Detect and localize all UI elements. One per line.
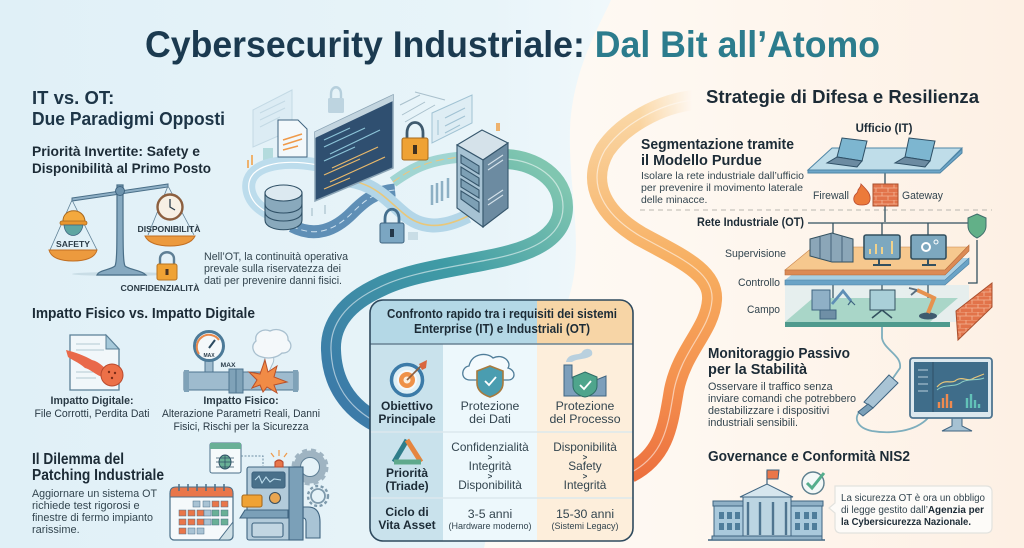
icon: industrial machine	[240, 450, 320, 540]
cell: IT priority: Disponibilità	[458, 478, 522, 492]
diagram: Purdue model	[640, 123, 992, 432]
cell: OT priority: >	[583, 453, 588, 462]
table: IT vs OT comparison	[370, 300, 633, 541]
icon: factory shield	[564, 349, 606, 397]
cell: IT priority: Integrità	[469, 459, 512, 473]
circuit lines	[400, 92, 445, 122]
text: continuity note: dati per prevenire danni fisici.	[204, 275, 342, 287]
label: confidenzialità: CONFIDENZIALITÀ	[120, 282, 200, 293]
ribbon: teal to blue flow	[331, 159, 563, 422]
icon: bug window	[210, 443, 263, 473]
table header: Confronto rapido tra i requisiti dei sistemi	[387, 306, 617, 321]
label: disponibilità: DISPONIBILITÀ	[138, 223, 200, 234]
text: patching description: Aggiornare un sistema OT	[32, 488, 157, 500]
text: monitoraggio description: Osservare il traffico senza	[708, 381, 833, 393]
callout: ANC obligation: di legge gestito dall’Agenzia per	[841, 505, 985, 516]
icon: government building	[708, 470, 825, 540]
icon: laptop right	[895, 138, 935, 167]
heading: monitoraggio: per la Stabilità	[708, 362, 808, 378]
row label: ciclo di vita: Vita Asset	[378, 518, 436, 532]
icon: document	[278, 120, 307, 157]
icon: shield	[968, 214, 986, 238]
icon: gears	[293, 450, 328, 506]
heading: patching: Il Dilemma del	[32, 451, 124, 468]
illustration: data flow from database to server	[248, 87, 508, 243]
icon: brick firewall	[873, 184, 898, 206]
label: impatto fisico: Alterazione Parametri Reali, Danni	[162, 408, 320, 420]
platform: controllo	[785, 258, 969, 285]
icon: monitor gears	[911, 235, 946, 265]
heading: priorità invertite: Disponibilità al Primo Posto	[32, 161, 211, 176]
heading: strategie: Strategie di Difesa e Resilienza	[706, 86, 980, 107]
label: controllo: Controllo	[738, 277, 780, 289]
table header: Enterprise (IT) e Industriali (OT)	[414, 321, 590, 336]
panel: IT vs OT	[32, 87, 349, 293]
cell: protezione processo: Protezione	[556, 399, 615, 413]
links between levels	[833, 275, 928, 298]
label: impatto fisico: Impatto Fisico:	[203, 395, 279, 407]
text: segmentazione description: delle minacce.	[641, 195, 707, 206]
icon: gauge and burst pipe	[184, 330, 298, 393]
pale swirl ribbon	[249, 162, 318, 220]
icon: robot cell	[812, 290, 855, 319]
row label: obiettivo: Obiettivo	[381, 399, 433, 413]
row label: priorità: Priorità	[386, 466, 428, 480]
icon: blue padlock	[380, 209, 404, 243]
label: max: MAX	[220, 362, 236, 369]
icon: padlock	[157, 252, 177, 280]
icon: gauge and burst pipe: MAX	[203, 353, 215, 359]
label: impatto fisico: Fisici, Rischi per la Sicurezza	[174, 421, 309, 433]
cell: OT priority: Safety	[568, 459, 602, 473]
icon: brick wall	[956, 283, 992, 340]
icon: database	[265, 185, 302, 230]
heading: IT vs OT: Due Paradigmi Opposti	[32, 108, 225, 129]
row label: ciclo di vita: Ciclo di	[385, 505, 429, 519]
field zone	[785, 285, 969, 322]
cell: OT lifecycle: 15-30 anni	[556, 507, 614, 521]
cell: OT priority: >	[583, 472, 588, 481]
label: gateway: Gateway	[902, 190, 944, 202]
label: safety: SAFETY	[56, 239, 90, 249]
icon: PLC cabinet	[810, 233, 853, 262]
label: ufficio: Ufficio (IT)	[856, 123, 913, 135]
row label: obiettivo: Principale	[378, 412, 436, 426]
callout: ANC obligation	[829, 486, 992, 533]
text: monitoraggio description: inviare comandi che potrebbero	[708, 393, 856, 405]
platform: supervisione	[785, 245, 969, 275]
heading: impatto: Impatto Fisico vs. Impatto Digitale	[32, 306, 255, 322]
callout: ANC obligation: la Cybersicurezza Nazionale.	[841, 517, 971, 528]
ribbon teal from window	[393, 157, 462, 182]
text: segmentazione description: Isolare la rete industriale dall’ufficio	[641, 171, 804, 182]
text: patching description: finestre di fermo impianto	[32, 512, 153, 524]
label: campo: Campo	[747, 304, 780, 316]
cell: IT lifecycle: 3-5 anni	[468, 507, 512, 521]
callout: ANC obligation: La sicurezza OT è ora un obbligo	[841, 493, 985, 504]
title: Cybersecurity Industriale: Dal Bit all’Atomo	[145, 24, 880, 65]
cell: IT priority: Confidenzialità	[451, 440, 529, 454]
icon: compliance check	[802, 472, 824, 494]
cell: OT priority: Disponibilità	[553, 440, 617, 454]
icon: monitoring display	[910, 358, 992, 431]
panel: monitoraggio passivo	[708, 346, 856, 429]
cell: OT priority: Integrità	[564, 478, 607, 492]
text: patching description: richiede test rigorosi e	[32, 500, 140, 512]
cell: OT lifecycle: (Sistemi Legacy)	[551, 521, 619, 531]
platform: office	[808, 148, 962, 173]
panel: governance	[708, 449, 992, 540]
heading: segmentazione: il Modello Purdue	[641, 153, 762, 169]
icon: corrupted file	[66, 335, 123, 390]
text: patching description: rarissime.	[32, 524, 80, 536]
label: impatto digitale: File Corrotti, Perdita Dati	[34, 408, 150, 420]
panel: patching dilemma	[32, 443, 328, 540]
label: supervisione: Supervisione	[725, 248, 786, 260]
row label: priorità: (Triade)	[385, 479, 429, 493]
pale background window left	[253, 90, 292, 147]
icon: calendar	[170, 484, 233, 540]
icon: orange padlock	[402, 122, 428, 160]
pale padlock	[328, 87, 344, 113]
label: firewall: Firewall	[813, 190, 849, 202]
icon: code window	[315, 95, 393, 201]
icon: laptop left	[827, 138, 867, 167]
platform: campo	[785, 298, 958, 327]
heading: governance: Governance e Conformità NIS2	[708, 449, 910, 465]
icon: server rack	[457, 130, 508, 227]
cell: protezione dati: Protezione	[461, 399, 520, 413]
text: monitoraggio description: destabilizzare i dispositivi	[708, 405, 829, 417]
heading: patching: Patching Industriale	[32, 467, 164, 484]
text: segmentazione description: per prevenire il movimento laterale	[641, 183, 803, 194]
label: impatto digitale: Impatto Digitale:	[50, 395, 134, 407]
icon: orange robot arm	[909, 288, 937, 320]
text: monitoraggio description: industriali sensibili.	[708, 417, 798, 429]
icon: flame	[854, 184, 870, 205]
ribbon: orange flow	[597, 100, 712, 473]
ribbon pale to server	[335, 180, 468, 225]
icon: target	[392, 360, 427, 396]
icon: scale with safety and availability	[49, 184, 200, 293]
heading: monitoraggio: Monitoraggio Passivo	[708, 346, 850, 362]
cell: IT lifecycle: (Hardware moderno)	[448, 521, 532, 531]
ribbon dark blue from database	[292, 190, 395, 232]
pale background window right	[432, 95, 472, 143]
probe cable	[857, 327, 928, 432]
heading: IT vs OT: IT vs. OT:	[32, 87, 114, 108]
cell: IT priority: >	[488, 453, 493, 462]
cell: protezione processo: del Processo	[549, 412, 621, 426]
icon: cloud shield	[463, 354, 514, 397]
text: continuity note: prevale sulla riservatezza dei	[204, 263, 341, 275]
small data bits	[248, 123, 500, 240]
icon: triad triangle	[394, 440, 421, 462]
icon: monitor chart	[864, 235, 900, 265]
icon: clock	[158, 194, 182, 220]
heading: priorità invertite: Priorità Invertite: Safety e	[32, 144, 200, 159]
icon: field sensor	[870, 290, 895, 318]
heading: segmentazione: Segmentazione tramite	[641, 137, 794, 153]
cell: protezione dati: dei Dati	[469, 412, 511, 426]
text: continuity note: Nell’OT, la continuità operativa	[204, 251, 349, 263]
panel: impatto fisico vs digitale	[32, 306, 320, 433]
icon: probe	[858, 375, 898, 416]
cell: IT priority: >	[488, 472, 493, 481]
panel: strategie di difesa	[641, 86, 980, 206]
label: rete industriale: Rete Industriale (OT)	[697, 217, 804, 229]
